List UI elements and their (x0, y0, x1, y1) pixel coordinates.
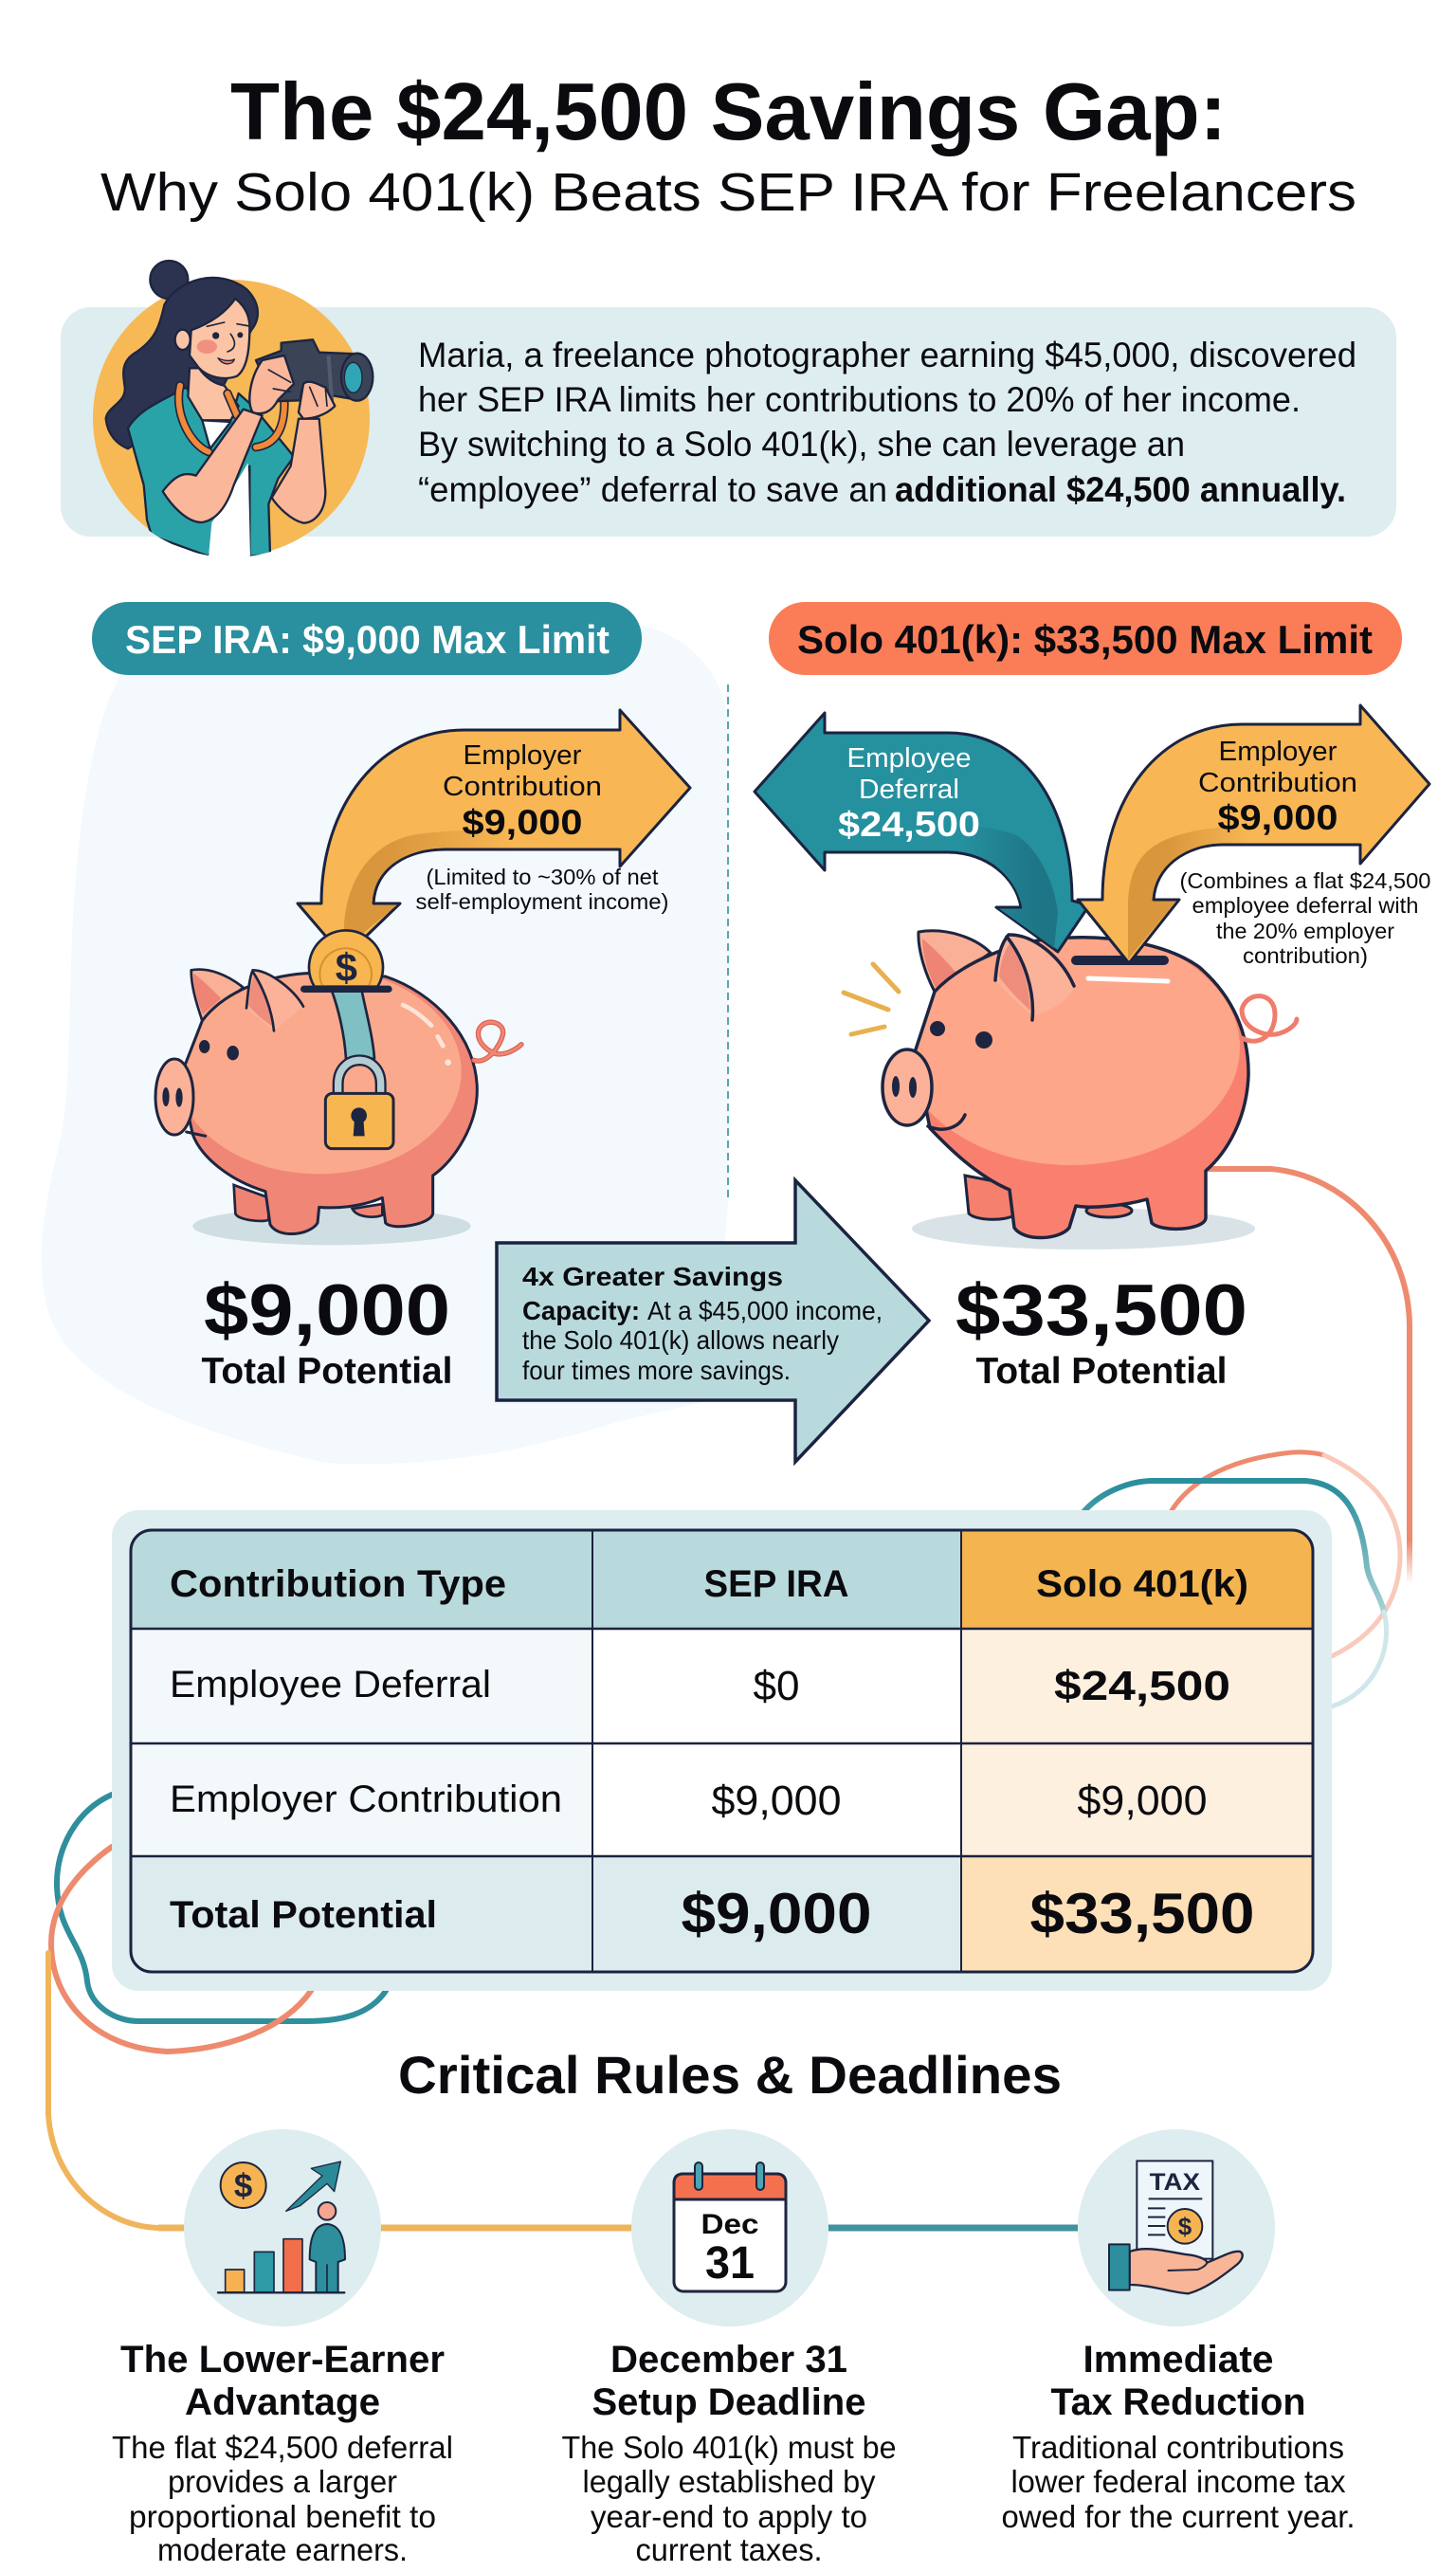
arrow: 4x greater savings callout: four times more savings. (522, 1356, 791, 1385)
title: The $24,500 Savings Gap: (230, 67, 1227, 157)
rule 2 description (561, 2430, 897, 2567)
arrow: 4x greater savings callout: 4x Greater Savings (522, 1262, 783, 1291)
rule 3 description: Traditional contributions (1012, 2430, 1344, 2465)
table row: total potential: $33,500 (1029, 1882, 1255, 1945)
table header row (170, 1563, 1248, 1605)
icon: growth bars and person (184, 2129, 381, 2326)
table row: employer contribution: Employer Contribution (170, 1779, 562, 1820)
arrow: employer contribution into Solo 401(k): Contribution (1198, 768, 1357, 798)
arrow: 4x greater savings callout (497, 1180, 929, 1462)
table row: employer contribution: $9,000 (1077, 1778, 1208, 1824)
note: Solo 401(k) combination: contribution) (1243, 943, 1368, 968)
heading pill: Solo 401(k) (769, 602, 1402, 675)
arrow: employer contribution into Solo 401(k): $9,000 (1217, 798, 1338, 837)
rule 3 title (1050, 2339, 1306, 2423)
timeline connector (158, 2224, 1078, 2232)
rule 2 title: Setup Deadline (592, 2381, 866, 2423)
rule 3 title: Immediate (1083, 2339, 1274, 2380)
panel: Solo 401(k) (755, 602, 1431, 1392)
arrow: employee deferral: Deferral (859, 775, 959, 805)
rule 3: immediate tax reduction (1001, 2129, 1356, 2534)
SEP IRA background blob (42, 626, 728, 1464)
table grid (131, 1530, 1313, 1972)
icon: tax form on hand: TAX (1150, 2169, 1200, 2196)
rule 3 description: lower federal income tax (1010, 2464, 1346, 2499)
panel: SEP IRA (92, 602, 690, 1392)
rule 3 title: Tax Reduction (1050, 2381, 1306, 2423)
arrow: employee deferral: $24,500 (838, 805, 980, 844)
icon: yellow circle behind photographer (93, 280, 370, 556)
rule 1 description: proportional benefit to (129, 2499, 436, 2534)
heading: critical rules and deadlines: Critical Rules & Deadlines (398, 2045, 1062, 2105)
icon: calendar: Dec (701, 2209, 758, 2240)
table row: employee deferral (170, 1663, 1230, 1709)
note: SEP limit (415, 865, 669, 914)
table row: employee deferral: $24,500 (1054, 1663, 1230, 1709)
icon: happy piggy bank (844, 930, 1297, 1250)
rule 1 description: The flat $24,500 deferral (112, 2430, 453, 2465)
table header row: Contribution Type (170, 1563, 506, 1605)
text block: Maria story (418, 336, 1356, 509)
rule 3 description: owed for the current year. (1001, 2499, 1356, 2534)
rule 2 description: legally established by (582, 2464, 876, 2499)
icon: growth bars and person: $ (234, 2167, 252, 2204)
table header row: SEP IRA (703, 1563, 849, 1605)
subtitle: Why Solo 401(k) Beats SEP IRA for Freelancers (100, 162, 1356, 223)
rule 2: December 31 deadline (561, 2129, 897, 2567)
arrow: employee deferral: Employee (847, 743, 971, 774)
rule 2 title: December 31 (610, 2339, 847, 2380)
note: Solo 401(k) combination (1179, 868, 1431, 968)
note: Solo 401(k) combination: the 20% employer (1216, 919, 1394, 943)
table row: total potential: Total Potential (170, 1894, 437, 1936)
rule 1 title: Advantage (185, 2381, 380, 2423)
icon: tax form on hand (1078, 2129, 1275, 2326)
rule 1 description (112, 2430, 453, 2567)
arrow: employee deferral (755, 713, 1089, 952)
big number: Solo total (956, 1270, 1247, 1392)
heading pill: SEP IRA: SEP IRA: $9,000 Max Limit (125, 617, 610, 662)
text block: Maria story: By switching to a Solo 401(k), she can leverage an (418, 425, 1185, 464)
arrow: 4x greater savings callout: Capacity: (522, 1296, 640, 1325)
arrow: employer contribution into SEP: $9,000 (463, 803, 582, 842)
arrow: 4x greater savings callout: At a $45,000 income, (647, 1296, 883, 1325)
table row: employee deferral: $0 (753, 1663, 800, 1709)
table cell backgrounds (131, 1530, 1313, 1972)
heading pill: Solo 401(k): Solo 401(k): $33,500 Max Limit (797, 617, 1373, 662)
icon: pig front ear (995, 935, 1074, 1020)
icon: calendar: 31 (705, 2238, 755, 2289)
big number: Solo total: Total Potential (976, 1351, 1227, 1392)
rule 1 description: moderate earners. (157, 2532, 408, 2567)
decorative connector lines behind panels (48, 1169, 1410, 2228)
panel: Maria intro (61, 261, 1396, 557)
arrow: employer contribution into SEP (298, 710, 690, 958)
table row: total potential (170, 1882, 1255, 1945)
big number: Solo total: $33,500 (956, 1270, 1247, 1351)
icon: locked piggy bank (155, 930, 521, 1245)
rule 1 description: provides a larger (168, 2464, 397, 2499)
text block: Maria story: “employee” deferral to save an (418, 470, 887, 509)
big number: SEP total: $9,000 (204, 1270, 450, 1351)
text block: Maria story: Maria, a freelance photographer earning $45,000, discovered (418, 336, 1356, 374)
arrow: 4x greater savings callout: the Solo 401(k) allows nearly (522, 1325, 839, 1355)
arrow: employer contribution into SEP: Contribution (443, 772, 602, 802)
table row: employer contribution (170, 1778, 1208, 1824)
panel: comparison table (112, 1510, 1332, 1991)
icon: calendar (631, 2129, 828, 2326)
divider dashed line (727, 684, 729, 1201)
rule 2 description: year-end to apply to (591, 2499, 867, 2534)
icon: tax form on hand: $ (1178, 2213, 1192, 2241)
arrow: employer contribution into Solo 401(k): Employer (1219, 737, 1338, 767)
rule 1: lower-earner advantage (112, 2129, 453, 2567)
rule 1 title (120, 2339, 445, 2423)
big number: SEP total (201, 1270, 453, 1392)
note: Solo 401(k) combination: employee deferral with (1192, 893, 1418, 918)
rule 2 title (592, 2339, 866, 2423)
text block: Maria story: her SEP IRA limits her contributions to 20% of her income. (418, 380, 1301, 419)
arrow: employer contribution into SEP: Employer (463, 740, 582, 771)
heading pill: SEP IRA (92, 602, 642, 675)
table row: total potential: $9,000 (681, 1882, 872, 1945)
rule 3 description (1001, 2430, 1356, 2534)
arrow: employer contribution into Solo 401(k) (1078, 705, 1429, 963)
icon: locked piggy bank: $ (336, 945, 357, 990)
note: SEP limit: (Limited to ~30% of net (427, 865, 659, 889)
icon: photographer woman (106, 261, 373, 557)
rule 2 description: current taxes. (635, 2532, 823, 2567)
rule 2 description: The Solo 401(k) must be (561, 2430, 897, 2465)
big number: SEP total: Total Potential (201, 1351, 453, 1392)
note: Solo 401(k) combination: (Combines a flat $24,500 (1179, 868, 1431, 893)
text block: Maria story: additional $24,500 annually. (895, 470, 1346, 509)
rule 1 title: The Lower-Earner (120, 2339, 445, 2380)
title (100, 67, 1356, 223)
table row: employer contribution: $9,000 (711, 1778, 842, 1824)
table header row: Solo 401(k) (1036, 1563, 1248, 1605)
table row: employee deferral: Employee Deferral (170, 1664, 491, 1706)
note: SEP limit: self-employment income) (415, 889, 669, 914)
